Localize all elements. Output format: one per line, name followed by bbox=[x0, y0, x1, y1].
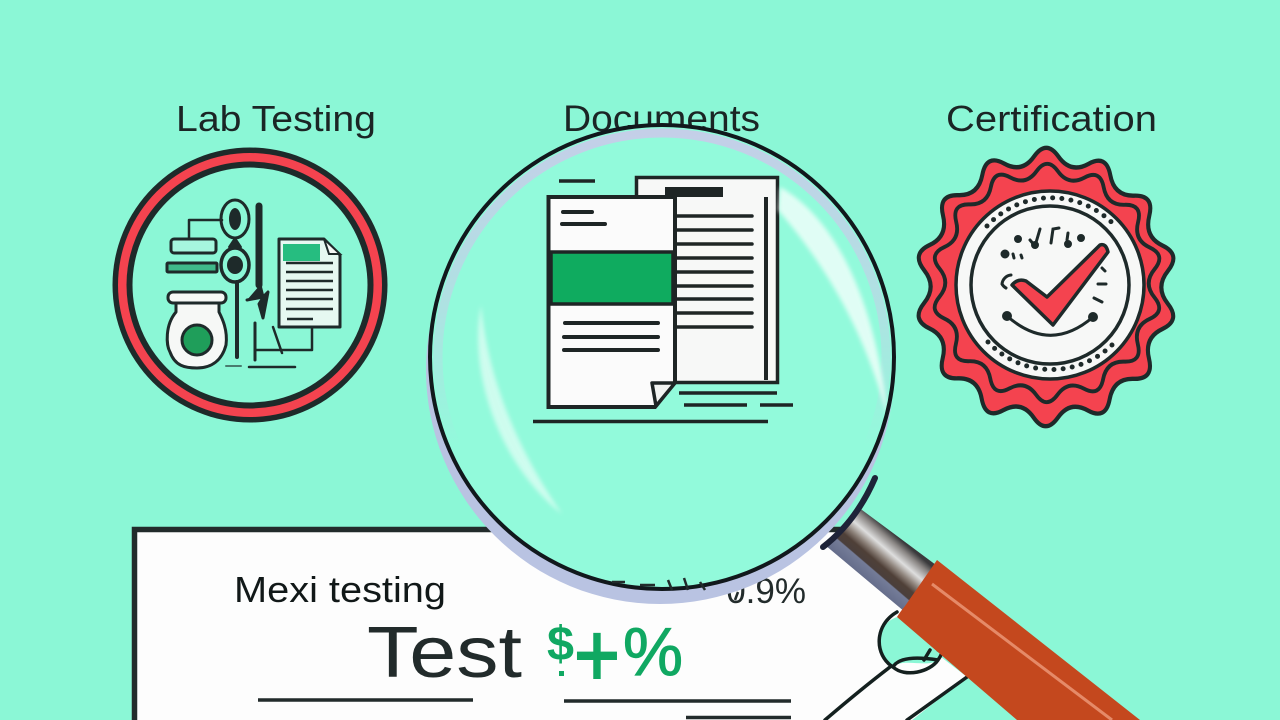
documents icon: front page bbox=[548, 197, 675, 407]
text: green test value bbox=[547, 606, 683, 706]
text: partial percentage: 0.9% bbox=[726, 572, 806, 611]
lens: lavender outer rim bbox=[426, 136, 894, 604]
icon: magnifier handle bbox=[825, 507, 1140, 720]
lens: dark joint to the handle bbox=[823, 478, 875, 547]
lens: black ring bbox=[430, 125, 894, 589]
seal: smile arc and small marks bbox=[1002, 228, 1106, 335]
heading: Documents: Documents bbox=[563, 98, 760, 139]
lens: glass interior bbox=[430, 125, 894, 589]
icon: report sheet bbox=[279, 239, 340, 327]
seal: outer wavy ribbon bbox=[890, 123, 1202, 451]
lens: upper right glare bbox=[778, 187, 888, 420]
panel: test report document bbox=[134, 530, 967, 720]
text: green test value: % bbox=[623, 614, 683, 690]
icon: lab apparatus bbox=[167, 200, 312, 367]
handle: orange grip bbox=[897, 560, 1140, 720]
documents icon: caption lines bbox=[533, 181, 793, 422]
seal: check mark bbox=[1012, 245, 1108, 325]
icon: sample jar bbox=[167, 292, 226, 368]
documents icon: back page bbox=[636, 178, 778, 382]
text: Mexi testing: Mexi testing bbox=[234, 569, 446, 610]
seal: white medallion bbox=[956, 191, 1144, 379]
lens: lower left glare bbox=[478, 305, 562, 514]
heading: Certification: Certification bbox=[946, 98, 1157, 139]
lens: inner rim shading bbox=[438, 133, 886, 581]
handle: metal collar bbox=[825, 507, 940, 612]
text: green test value: $ bbox=[547, 618, 574, 671]
icon: hand holding magnifier bbox=[825, 612, 967, 720]
icon: magnifying glass lens bbox=[426, 125, 894, 604]
seal: inner wavy ribbon bbox=[910, 143, 1184, 423]
icon: certification seal bbox=[890, 123, 1202, 451]
document rule lines bbox=[258, 700, 791, 718]
icon: lab testing badge bbox=[112, 148, 388, 422]
lens: distorted text fragments bbox=[612, 578, 738, 600]
text: green test value: + bbox=[574, 606, 620, 706]
heading: Lab Testing: Lab Testing bbox=[176, 98, 376, 139]
text: Test: Test bbox=[367, 613, 522, 693]
